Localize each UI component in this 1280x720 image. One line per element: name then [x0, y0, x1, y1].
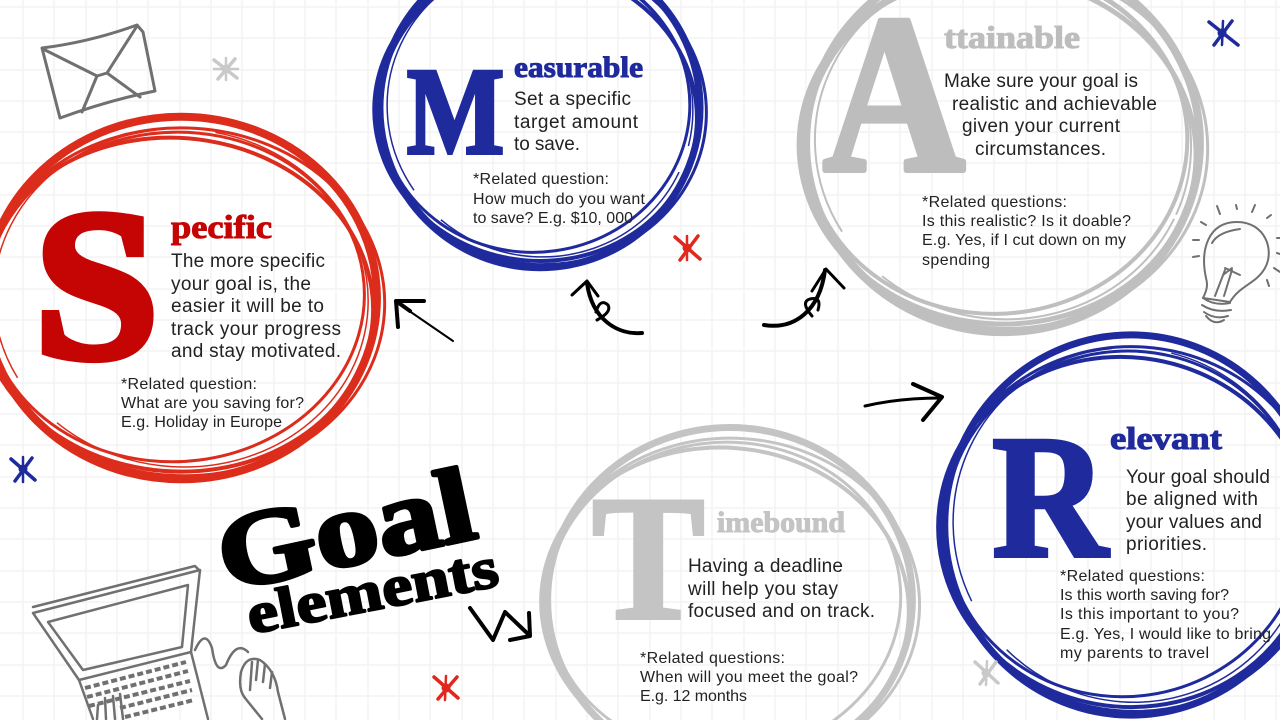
body text: track your progress: [171, 319, 341, 340]
related question: E.g. Holiday in Europe: [121, 414, 282, 431]
body text: will help you stay: [687, 579, 838, 600]
panel: specific: [34, 167, 341, 431]
related question: *Related question:: [473, 171, 609, 188]
arrow: to specific: [396, 301, 453, 341]
related questions: *Related questions:: [922, 194, 1067, 211]
body text: given your current: [962, 116, 1121, 137]
star: red centre: [675, 236, 700, 260]
ring: relevant (blue): [895, 289, 1280, 720]
related questions: [922, 194, 1131, 269]
related question: [121, 376, 304, 431]
related questions: When will you meet the goal?: [640, 669, 858, 686]
body text: realistic and achievable: [952, 94, 1157, 115]
big letter T: T: [592, 459, 705, 657]
big letter M: M: [407, 42, 504, 180]
related questions: *Related questions:: [1060, 568, 1205, 585]
ring: specific (red): [0, 73, 429, 523]
body text: easier it will be to: [171, 296, 324, 317]
big letter S: S: [34, 167, 159, 404]
panel: relevant: [992, 400, 1271, 662]
arrow: to attainable: [764, 269, 844, 326]
body text: priorities.: [1126, 534, 1207, 555]
body text: [514, 89, 639, 155]
body text: Having a deadline: [688, 556, 843, 577]
body text: target amount: [514, 112, 639, 133]
related questions: Is this important to you?: [1060, 606, 1239, 623]
related question: *Related question:: [121, 376, 257, 393]
related questions: Is this realistic? Is it doable?: [922, 213, 1131, 230]
ring: attainable (grey): [754, 0, 1252, 378]
related question: to save? E.g. $10, 000: [473, 210, 633, 227]
heading: ttainable: ttainable: [944, 19, 1080, 55]
ring: timebound (grey): [514, 420, 936, 720]
arrow: to relevant: [865, 384, 942, 420]
body text: [1126, 467, 1270, 555]
arrow: to measurable: [572, 281, 642, 333]
star: blue left: [11, 457, 35, 482]
body text: Make sure your goal is: [944, 71, 1138, 92]
panel: timebound: [592, 459, 875, 705]
related questions: my parents to travel: [1060, 645, 1209, 662]
arrow: title squiggle: [470, 608, 530, 640]
related questions: E.g. Yes, if I cut down on my: [922, 232, 1126, 249]
body text: to save.: [514, 134, 580, 155]
body text: Set a specific: [514, 89, 631, 110]
body text: your goal is, the: [171, 274, 311, 295]
related questions: spending: [922, 252, 990, 269]
related questions: [640, 650, 858, 705]
related questions: E.g. Yes, I would like to bring: [1060, 626, 1271, 643]
body text: [687, 556, 875, 622]
heading: pecific: pecific: [171, 210, 272, 246]
body text: [171, 251, 341, 362]
related question: How much do you want: [473, 191, 646, 208]
big letter R: R: [992, 400, 1109, 595]
heading: easurable: easurable: [514, 51, 643, 84]
body text: your values and: [1126, 512, 1262, 533]
title: Goal elements: Goal: [207, 445, 485, 614]
star: blue top right: [1209, 21, 1238, 45]
ring: measurable (blue): [337, 0, 743, 306]
body text: focused and on track.: [688, 601, 875, 622]
related questions: *Related questions:: [640, 650, 785, 667]
related question: What are you saving for?: [121, 395, 304, 412]
panel: attainable: [823, 0, 1157, 269]
icon: light bulb: [1193, 205, 1280, 322]
body text: be aligned with: [1126, 489, 1258, 510]
icon: envelope: [42, 25, 155, 118]
heading: elevant: elevant: [1110, 420, 1222, 456]
related questions: E.g. 12 months: [640, 688, 747, 705]
star: grey bottom right: [975, 661, 998, 685]
heading: imebound: imebound: [717, 506, 845, 539]
body text: Your goal should: [1126, 467, 1270, 488]
body text: circumstances.: [975, 139, 1106, 160]
related questions: [1060, 568, 1271, 662]
icon: laptop and mouse: [33, 566, 285, 719]
panel: measurable: [407, 42, 646, 227]
star: grey top left: [214, 58, 238, 80]
related question: [473, 171, 646, 227]
related questions: Is this worth saving for?: [1060, 587, 1229, 604]
title: Goal elements: elements: [241, 534, 503, 647]
body text: [944, 71, 1157, 160]
star: red bottom: [434, 676, 458, 700]
body text: The more specific: [171, 251, 325, 272]
body text: and stay motivated.: [171, 341, 341, 362]
